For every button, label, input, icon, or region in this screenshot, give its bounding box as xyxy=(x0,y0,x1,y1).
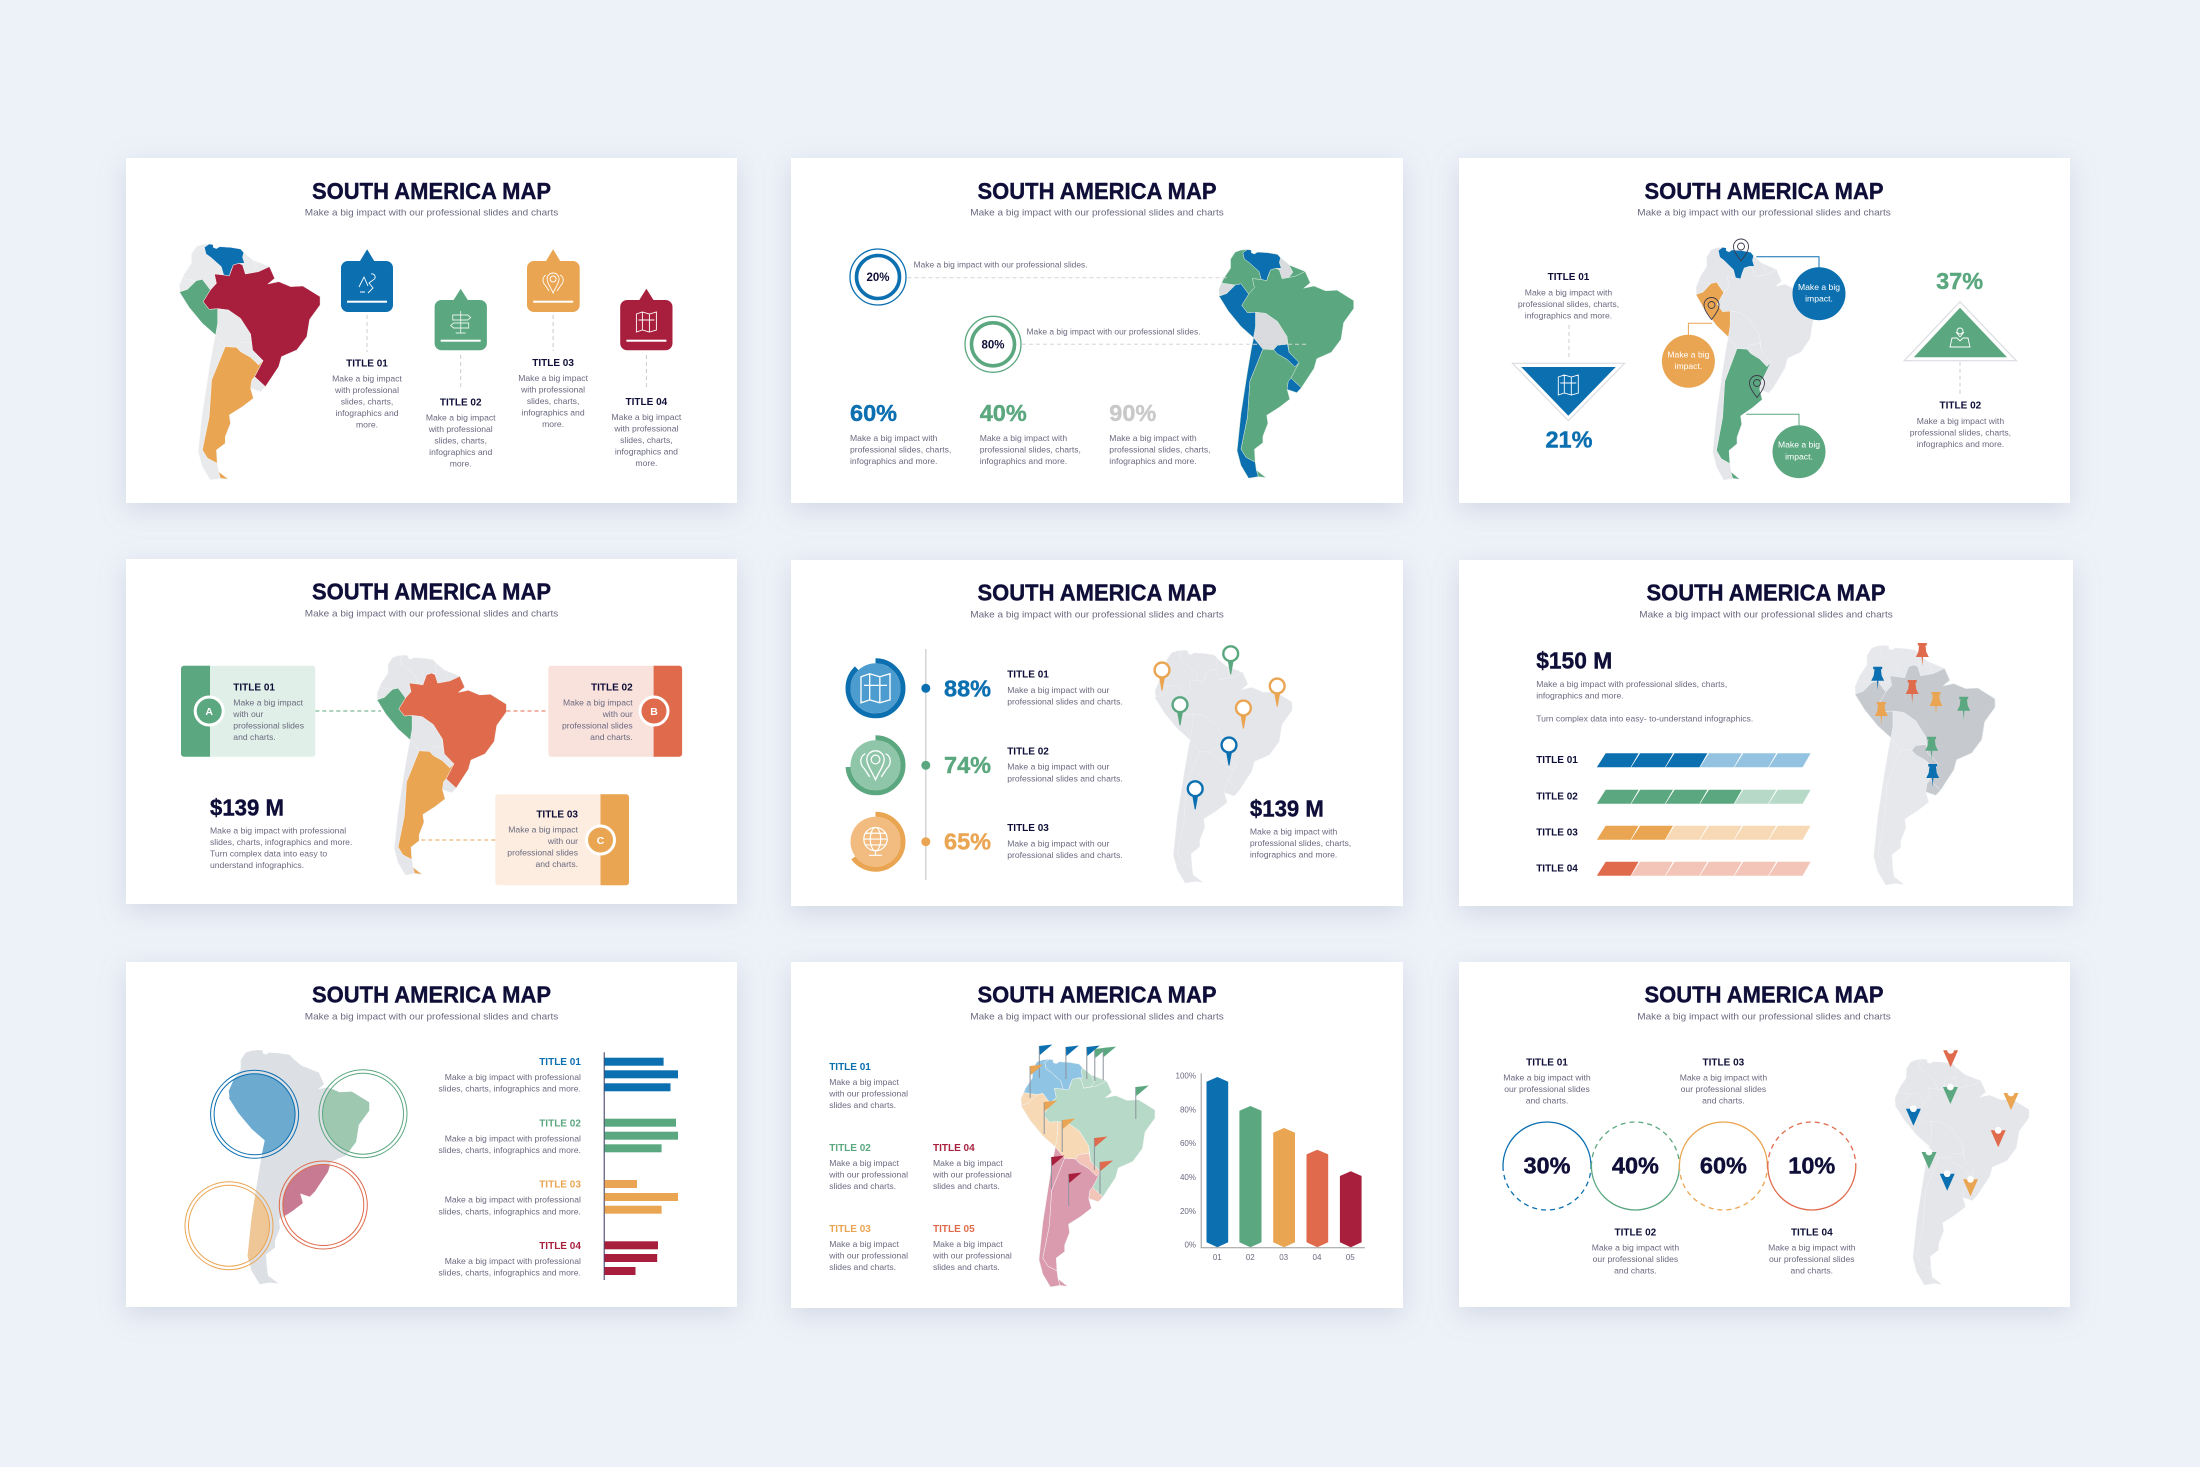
bar: title 01: TITLE 01 xyxy=(1536,755,1578,766)
box A: A xyxy=(205,706,213,718)
text block: title 01: TITLE 01 xyxy=(1526,1057,1568,1068)
ring: 80%: Make a big impact with our professional slides. xyxy=(1026,327,1200,337)
row: 74% xyxy=(848,738,1123,793)
row: 74%: 74% xyxy=(944,752,991,778)
row: 88%: 88% xyxy=(944,675,991,701)
bar chart: 80% xyxy=(1180,1105,1196,1114)
text block: title 04 xyxy=(932,1143,1012,1191)
text block: title 01: and charts. xyxy=(1526,1095,1568,1105)
callout: title 04: Make a big impact xyxy=(612,412,682,422)
lens: blue xyxy=(210,1070,300,1159)
callout: title 03: more. xyxy=(542,419,564,429)
panel: slide 6, segmented bars xyxy=(1459,560,2073,906)
row: title 02 xyxy=(439,1118,678,1155)
callout: title 04: slides, charts, xyxy=(620,435,673,445)
title: SOUTH AMERICA MAP xyxy=(312,579,551,605)
text block: title 04: and charts. xyxy=(1791,1266,1833,1276)
text block: title 01: our professional slides xyxy=(1504,1084,1590,1094)
statistic: $139 M: Turn complex data into easy to xyxy=(210,848,327,858)
stat: 90%: Make a big impact with xyxy=(1109,433,1197,443)
box A: and charts. xyxy=(233,732,276,742)
box B: and charts. xyxy=(590,732,633,742)
triangle: 21% xyxy=(1512,363,1625,453)
text block: title 04: with our professional xyxy=(932,1170,1012,1180)
callout: title 01: more. xyxy=(356,420,378,430)
text block: title 03 xyxy=(828,1224,908,1272)
ring: 20%: Make a big impact with our professional slides. xyxy=(914,260,1088,270)
text block: title 03: TITLE 03 xyxy=(829,1224,871,1235)
stat: 40%: professional slides, charts, xyxy=(980,444,1081,454)
lens: red xyxy=(278,1160,368,1250)
statistic: $139 M: $139 M xyxy=(210,795,284,821)
subtitle: Make a big impact with our professional slides and charts xyxy=(970,1011,1224,1022)
bar chart: 20% xyxy=(1180,1207,1196,1216)
text block: title 05: slides and charts. xyxy=(933,1262,1000,1272)
bar: title 02: TITLE 02 xyxy=(1536,791,1578,802)
row: title 04: slides, charts, infographics and more. xyxy=(439,1268,581,1278)
row: 88% xyxy=(848,661,1123,716)
text block: title 05: TITLE 05 xyxy=(933,1224,975,1235)
box B: B xyxy=(650,706,658,718)
flags xyxy=(1030,1044,1149,1206)
circle: 60% xyxy=(1679,1122,1767,1210)
panel: slide 9, linked circles xyxy=(1459,962,2070,1307)
circle: 60%: 60% xyxy=(1700,1152,1747,1178)
callout: title 01: slides, charts, xyxy=(341,397,393,407)
statistic: $150 M: $150 M xyxy=(1536,647,1612,673)
text block: title 04: TITLE 04 xyxy=(933,1143,975,1154)
map: grey xyxy=(1155,650,1292,883)
box C: C xyxy=(597,835,605,847)
push pins xyxy=(1871,643,1970,787)
callout: title 02: with professional xyxy=(428,424,493,434)
bubble: orange xyxy=(1662,323,1715,388)
row: title 01: slides, charts, infographics and more. xyxy=(439,1084,581,1094)
triangle: 37% xyxy=(1904,268,2016,397)
row: title 04: Make a big impact with professional xyxy=(445,1256,581,1266)
bubble: green: Make a big xyxy=(1778,440,1820,450)
statistic: $150 M: Turn complex data into easy- to-understand infographics. xyxy=(1536,714,1753,724)
panel: slide 7, circles and bars xyxy=(126,962,737,1307)
panel: slide 1, callouts xyxy=(126,158,737,503)
bar: title 04 xyxy=(1536,862,1811,876)
bubble: blue xyxy=(1756,257,1846,320)
row: title 01 xyxy=(439,1057,678,1094)
circle: 30%: 30% xyxy=(1523,1152,1571,1178)
statistic: $139 M: $139 M xyxy=(1250,795,1324,821)
circle: 30% xyxy=(1503,1122,1591,1210)
text block: title 01 xyxy=(1518,272,1619,360)
callout: title 01 xyxy=(332,249,402,430)
box B: with our xyxy=(602,709,633,719)
triangle: 37%: 37% xyxy=(1936,268,1983,294)
text block: title 01: professional slides, charts, xyxy=(1518,299,1619,309)
bar: title 03 xyxy=(1536,826,1811,840)
callout: title 03: TITLE 03 xyxy=(532,358,574,369)
callout: title 03: with professional xyxy=(520,384,585,394)
row: title 02: TITLE 02 xyxy=(539,1118,581,1129)
text block: title 02: Make a big impact with xyxy=(1592,1243,1679,1253)
title: SOUTH AMERICA MAP xyxy=(978,178,1216,204)
text block: title 03: slides and charts. xyxy=(829,1262,896,1272)
text block: title 03: Make a big impact with xyxy=(1680,1072,1767,1082)
subtitle: Make a big impact with our professional slides and charts xyxy=(305,1011,559,1022)
row: title 02: slides, charts, infographics and more. xyxy=(439,1145,581,1155)
row: 65%: Make a big impact with our xyxy=(1007,838,1110,848)
ring: 80% xyxy=(965,316,1307,372)
text block: title 02: Make a big impact xyxy=(829,1158,900,1168)
callout: title 01: infographics and xyxy=(335,408,399,418)
callout: title 02: infographics and xyxy=(429,447,492,457)
text block: title 02: TITLE 02 xyxy=(1940,401,1982,412)
statistic: $139 M: understand infographics. xyxy=(210,860,304,870)
text block: title 05: Make a big impact xyxy=(933,1239,1003,1249)
text block: title 03: Make a big impact xyxy=(829,1239,900,1249)
map: highlighted countries xyxy=(1696,247,1822,480)
text block: title 02 xyxy=(828,1143,908,1191)
text block: title 05 xyxy=(932,1224,1012,1272)
callout: title 04: more. xyxy=(635,458,657,468)
map: grey with darker countries xyxy=(1855,645,1995,885)
row: 65% xyxy=(848,814,1123,869)
bar chart: 0% xyxy=(1184,1241,1196,1250)
circle: 40%: 40% xyxy=(1612,1152,1659,1178)
callout: title 03 xyxy=(518,249,589,429)
bubble: green xyxy=(1746,414,1826,478)
circle: 10% xyxy=(1768,1122,1856,1210)
box C xyxy=(421,794,629,885)
box C: Make a big impact xyxy=(508,825,579,835)
row: title 02: Make a big impact with professional xyxy=(445,1133,581,1143)
panel: slide 5, timeline with markers xyxy=(791,560,1403,906)
text block: title 01: slides and charts. xyxy=(829,1100,896,1110)
row: 88%: TITLE 01 xyxy=(1007,670,1049,681)
callout: title 02: more. xyxy=(450,459,472,469)
text block: title 01 xyxy=(828,1062,908,1110)
bar: title 03: TITLE 03 xyxy=(1536,827,1578,838)
bar chart: 05 xyxy=(1346,1253,1355,1262)
callout: title 02: Make a big impact xyxy=(426,413,496,423)
statistic: $139 M xyxy=(210,795,352,870)
box A: professional slides xyxy=(233,721,304,731)
callout: title 04: infographics and xyxy=(615,446,678,456)
stat: 60%: 60% xyxy=(850,400,897,426)
title: SOUTH AMERICA MAP xyxy=(1646,580,1886,606)
callout: title 03: slides, charts, xyxy=(527,396,579,406)
text block: title 01: Make a big impact with xyxy=(1503,1072,1591,1082)
map: coloured countries xyxy=(179,244,320,480)
axis line xyxy=(603,1052,605,1280)
stat: 90% xyxy=(1109,400,1211,466)
bar chart: 40% xyxy=(1180,1173,1196,1182)
callout: title 04: with professional xyxy=(613,424,678,434)
row: 65%: professional slides and charts. xyxy=(1007,850,1123,860)
drop pins xyxy=(1906,1047,2018,1196)
text block: title 01: TITLE 01 xyxy=(829,1062,871,1073)
text block: title 01: infographics and more. xyxy=(1525,311,1612,321)
bubble: green: impact. xyxy=(1785,451,1813,461)
text block: title 02: TITLE 02 xyxy=(1615,1228,1657,1239)
box C: TITLE 03 xyxy=(536,810,578,821)
bar: title 01 xyxy=(1536,753,1811,767)
row: 88%: professional slides and charts. xyxy=(1007,697,1123,707)
row: title 03: TITLE 03 xyxy=(539,1180,581,1191)
stat: 60%: professional slides, charts, xyxy=(850,444,951,454)
row: title 03: slides, charts, infographics and more. xyxy=(439,1206,581,1216)
ring: 80%: 80% xyxy=(981,339,1005,351)
text block: title 02: and charts. xyxy=(1614,1266,1657,1276)
box A: Make a big impact xyxy=(233,698,304,708)
subtitle: Make a big impact with our professional slides and charts xyxy=(1637,207,1891,218)
box B: Make a big impact xyxy=(563,698,633,708)
stat: 60% xyxy=(850,400,951,466)
row: title 04 xyxy=(439,1241,658,1278)
callout: title 02: slides, charts, xyxy=(434,436,487,446)
circle: 40% xyxy=(1591,1122,1679,1210)
bar chart: 03 xyxy=(1279,1253,1289,1262)
bar chart: 02 xyxy=(1246,1253,1255,1262)
text block: title 03 xyxy=(1680,1057,1767,1105)
circle: 10%: 10% xyxy=(1788,1152,1835,1178)
box A: TITLE 01 xyxy=(233,683,275,694)
map: coloured countries xyxy=(377,655,506,875)
row: title 01: Make a big impact with professional xyxy=(445,1072,581,1082)
timeline xyxy=(925,649,927,880)
box A xyxy=(181,666,381,757)
statistic: $139 M xyxy=(1250,795,1351,859)
box B: TITLE 02 xyxy=(591,683,633,694)
callout: title 01: Make a big impact xyxy=(332,374,402,384)
callout: title 03: infographics and xyxy=(522,408,585,418)
row: 88%: Make a big impact with our xyxy=(1007,685,1110,695)
row: title 01: TITLE 01 xyxy=(539,1057,581,1068)
callout: title 04: TITLE 04 xyxy=(626,397,668,408)
text block: title 03: our professional slides xyxy=(1681,1084,1766,1094)
statistic: $139 M: Make a big impact with xyxy=(1250,826,1338,836)
text block: title 03: TITLE 03 xyxy=(1703,1057,1745,1068)
bubble: orange: impact. xyxy=(1675,361,1702,371)
text block: title 02: slides and charts. xyxy=(829,1181,896,1191)
row: 65%: TITLE 03 xyxy=(1007,823,1049,834)
statistic: $150 M: Make a big impact with professional slides, charts, xyxy=(1536,679,1727,689)
text block: title 04 xyxy=(1768,1228,1856,1276)
stat: 40%: infographics and more. xyxy=(980,456,1067,466)
text block: title 02 xyxy=(1592,1228,1679,1276)
box C: and charts. xyxy=(535,859,578,869)
bar chart: 60% xyxy=(1180,1139,1196,1148)
row: 74%: professional slides and charts. xyxy=(1007,773,1123,783)
lens: orange xyxy=(184,1181,274,1270)
text block: title 01: Make a big impact with xyxy=(1525,288,1612,298)
callout: title 01: TITLE 01 xyxy=(346,359,388,370)
bar: title 04: TITLE 04 xyxy=(1536,864,1578,875)
panel: slide 2, rings and percentages xyxy=(791,158,1403,503)
ring: 20%: 20% xyxy=(866,272,890,284)
row: 74%: Make a big impact with our xyxy=(1007,762,1110,772)
row: 74%: TITLE 02 xyxy=(1007,746,1049,757)
text block: title 02: with our professional xyxy=(828,1170,908,1180)
subtitle: Make a big impact with our professional slides and charts xyxy=(305,608,559,619)
map: green and blue countries xyxy=(1219,250,1354,478)
row: title 04: TITLE 04 xyxy=(539,1241,581,1252)
subtitle: Make a big impact with our professional slides and charts xyxy=(1637,1011,1891,1022)
callout: title 02 xyxy=(426,289,496,469)
bar chart: 04 xyxy=(1313,1253,1322,1262)
panel: slide 3, triangles and bubbles xyxy=(1459,158,2070,503)
statistic: $150 M: infographics and more. xyxy=(1536,691,1624,701)
map markers xyxy=(1155,646,1285,809)
ring: 20% xyxy=(850,249,1227,305)
stat: 60%: Make a big impact with xyxy=(850,433,938,443)
stat: 90%: infographics and more. xyxy=(1109,456,1197,466)
bar chart: 01 xyxy=(1213,1253,1222,1262)
title: SOUTH AMERICA MAP xyxy=(978,982,1216,1008)
triangle: 21%: 21% xyxy=(1545,427,1593,453)
statistic: $139 M: professional slides, charts, xyxy=(1250,838,1351,848)
text block: title 02 xyxy=(1910,401,2011,449)
bubble: orange: Make a big xyxy=(1667,349,1710,359)
map: grey xyxy=(1895,1059,2029,1285)
title: SOUTH AMERICA MAP xyxy=(1644,178,1884,204)
text block: title 01: TITLE 01 xyxy=(1548,272,1590,283)
title: SOUTH AMERICA MAP xyxy=(312,982,551,1008)
text block: title 04: slides and charts. xyxy=(933,1181,1000,1191)
bar chart: 100% xyxy=(1176,1071,1196,1080)
subtitle: Make a big impact with our professional slides and charts xyxy=(970,609,1224,620)
text block: title 03: with our professional xyxy=(828,1250,908,1260)
title: SOUTH AMERICA MAP xyxy=(312,178,551,204)
text block: title 04: our professional slides xyxy=(1769,1254,1855,1264)
stat: 60%: infographics and more. xyxy=(850,456,937,466)
text block: title 04: TITLE 04 xyxy=(1791,1228,1833,1239)
text block: title 02: our professional slides xyxy=(1593,1254,1678,1264)
callout: title 04 xyxy=(612,289,682,468)
box A: with our xyxy=(232,709,264,719)
text block: title 04: Make a big impact xyxy=(933,1158,1003,1168)
callout: title 03: Make a big impact xyxy=(518,373,589,383)
box C: professional slides xyxy=(507,848,578,858)
box B: professional slides xyxy=(562,721,633,731)
text block: title 02: TITLE 02 xyxy=(829,1143,871,1154)
bar: title 02 xyxy=(1536,790,1811,804)
text block: title 01: Make a big impact xyxy=(829,1077,900,1087)
row: 65%: 65% xyxy=(944,829,991,855)
stat: 90%: professional slides, charts, xyxy=(1109,444,1211,454)
text block: title 02: Make a big impact with xyxy=(1917,416,2004,426)
title: SOUTH AMERICA MAP xyxy=(978,580,1216,606)
box B xyxy=(506,666,682,757)
text block: title 03: and charts. xyxy=(1702,1095,1745,1105)
text block: title 01 xyxy=(1503,1057,1591,1105)
map: grey xyxy=(229,1050,369,1284)
map pins xyxy=(1704,239,1764,398)
bubble: blue: impact. xyxy=(1805,293,1833,303)
row: title 03: Make a big impact with professional xyxy=(445,1195,581,1205)
panel: slide 4, lettered boxes xyxy=(126,559,737,904)
box C: with our xyxy=(547,836,578,846)
stat: 40%: Make a big impact with xyxy=(980,433,1067,443)
panel: slide 8, flags and bar chart xyxy=(791,962,1403,1308)
text block: title 05: with our professional xyxy=(932,1250,1012,1260)
map: pastel regions xyxy=(1021,1059,1155,1287)
title: SOUTH AMERICA MAP xyxy=(1644,982,1884,1008)
bubble: blue: Make a big xyxy=(1798,282,1840,292)
lens: green xyxy=(318,1069,408,1158)
subtitle: Make a big impact with our professional slides and charts xyxy=(1639,609,1893,620)
text block: title 02: professional slides, charts, xyxy=(1910,427,2011,437)
callout: title 01: with professional xyxy=(334,385,399,395)
text block: title 04: Make a big impact with xyxy=(1768,1243,1856,1253)
stat: 40% xyxy=(980,400,1081,466)
row: title 03 xyxy=(439,1180,678,1216)
stat: 90%: 90% xyxy=(1109,400,1156,426)
subtitle: Make a big impact with our professional slides and charts xyxy=(305,207,559,218)
stat: 40%: 40% xyxy=(980,400,1027,426)
text block: title 02: infographics and more. xyxy=(1917,439,2004,449)
statistic: $150 M xyxy=(1536,647,1753,724)
bar chart xyxy=(1176,1071,1365,1262)
subtitle: Make a big impact with our professional slides and charts xyxy=(970,207,1224,218)
text block: title 01: with our professional xyxy=(828,1088,908,1098)
statistic: $139 M: Make a big impact with professional xyxy=(210,825,346,835)
callout: title 02: TITLE 02 xyxy=(440,397,482,408)
statistic: $139 M: slides, charts, infographics and more. xyxy=(210,837,352,847)
statistic: $139 M: infographics and more. xyxy=(1250,849,1337,859)
